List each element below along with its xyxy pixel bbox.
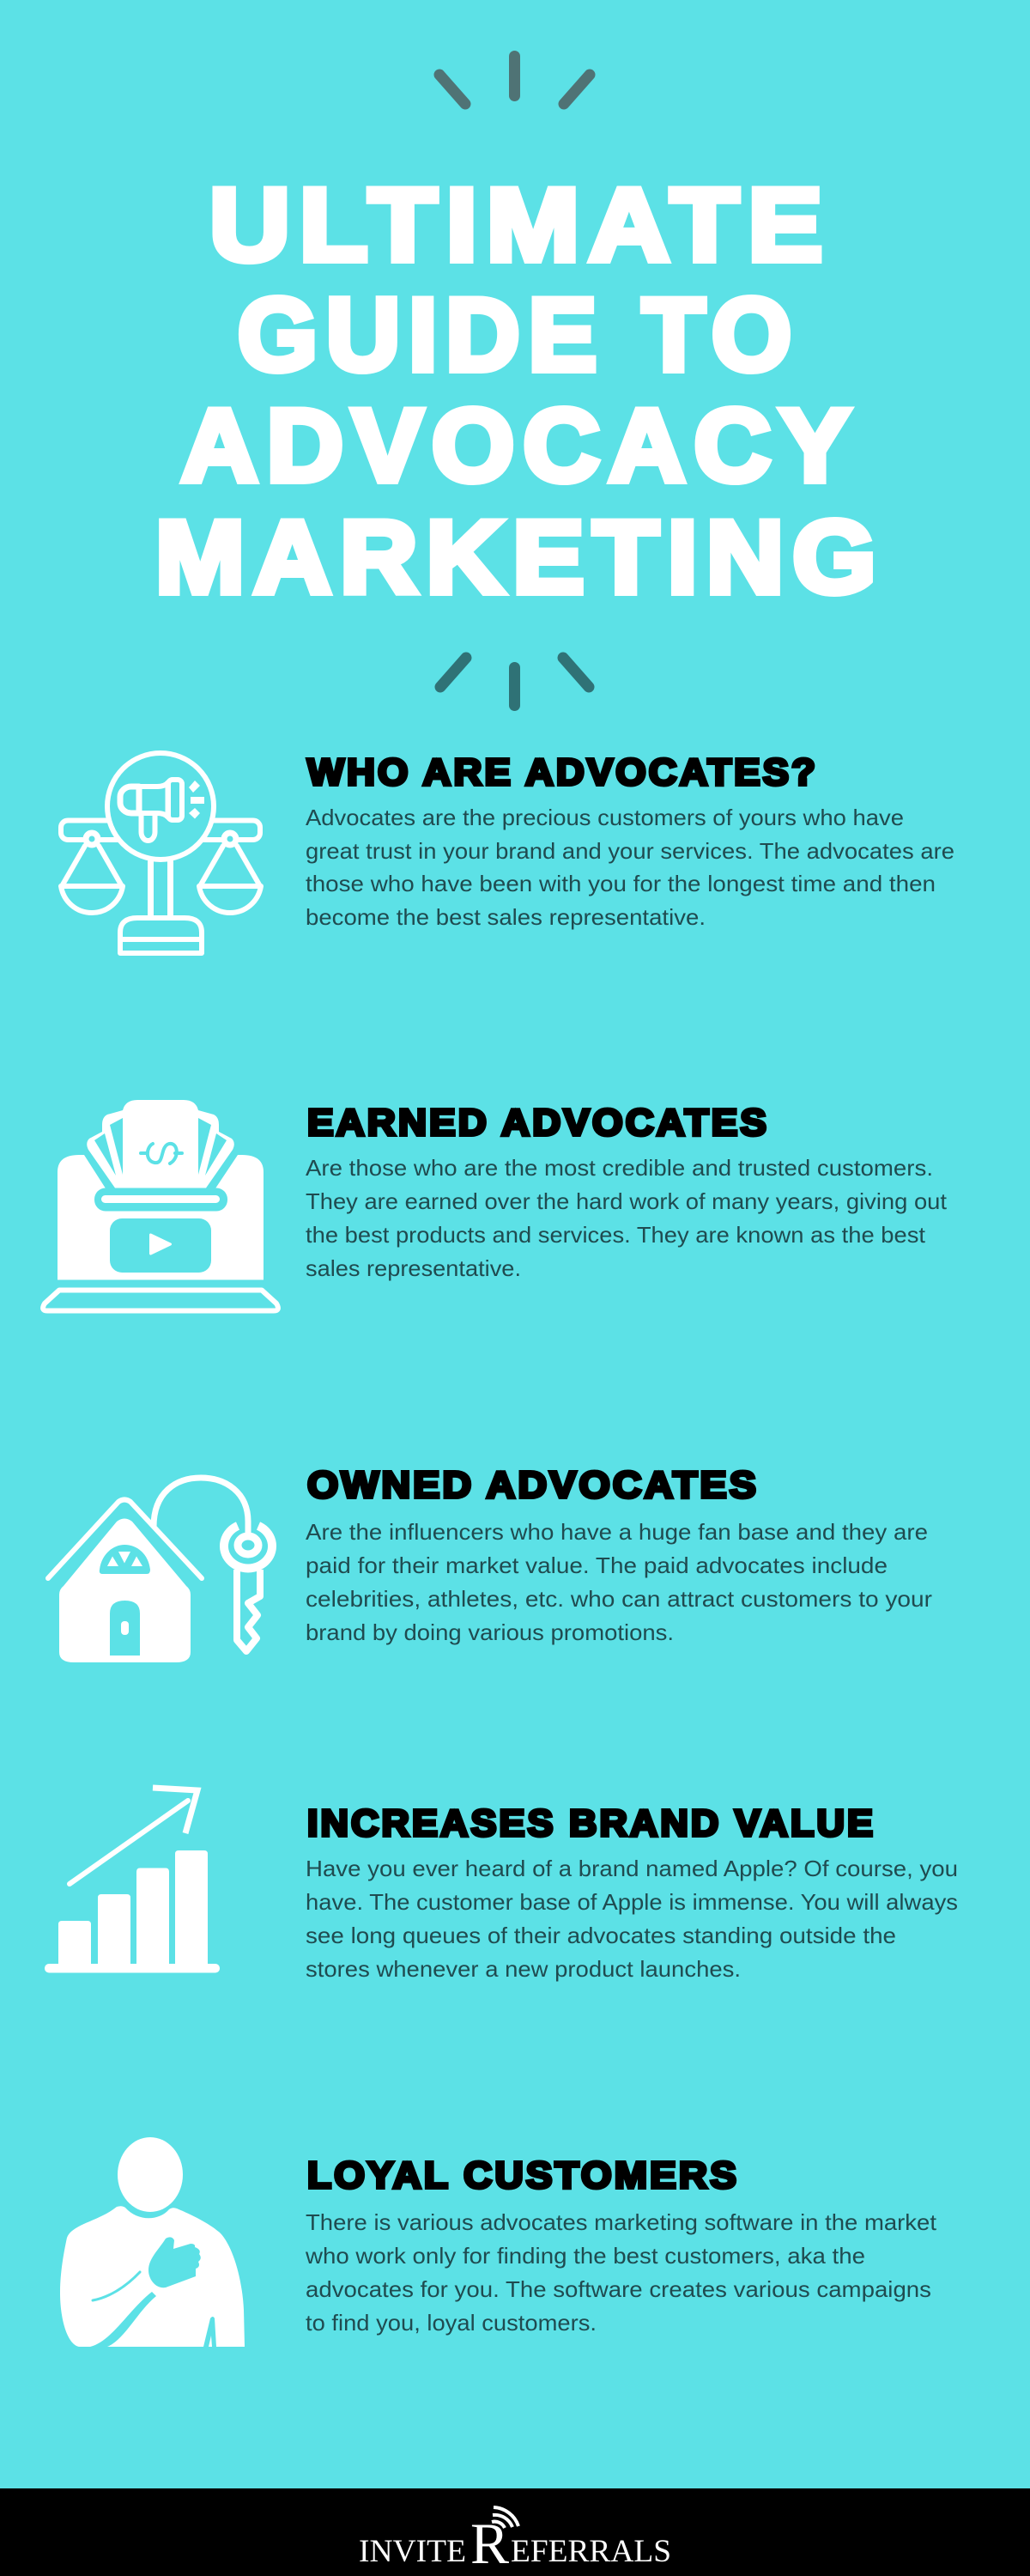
logo: InviteReferrals: R — [470, 2511, 510, 2576]
text block — [306, 1155, 948, 1281]
text block — [306, 1519, 932, 1645]
text block: They are earned over the hard work of many years, giving out — [306, 1188, 948, 1214]
text block: see long queues of their advocates standing outside the — [306, 1923, 896, 1948]
heading: LOYAL CUSTOMERS — [307, 2154, 739, 2196]
logo: InviteReferrals: EFERRALS — [511, 2534, 671, 2569]
text block: become the best sales representative. — [306, 904, 706, 930]
text block: paid for their market value. The paid advocates include — [306, 1552, 888, 1578]
text block: Are those who are the most credible and trusted customers. — [306, 1155, 933, 1181]
text block: celebrities, athletes, etc. who can attract customers to your — [306, 1586, 932, 1612]
title: GUIDE TO — [238, 277, 800, 392]
bottom burst rays — [440, 658, 589, 706]
panel: loyal customers — [60, 2137, 937, 2347]
title: ULTIMATE — [209, 167, 832, 283]
icon: scales with megaphone — [61, 753, 261, 953]
icon: rising bar chart with arrow — [45, 1788, 220, 1973]
panel: increases brand value — [45, 1788, 958, 1982]
footer band — [0, 2488, 1030, 2576]
text block — [306, 805, 954, 930]
text block: Are the influencers who have a huge fan base and they are — [306, 1519, 928, 1545]
logo: InviteReferrals: INVITE — [359, 2534, 466, 2569]
heading: EARNED ADVOCATES — [307, 1102, 769, 1144]
logo: InviteReferrals — [359, 2507, 671, 2576]
heading: INCREASES BRAND VALUE — [307, 1802, 876, 1844]
text block: great trust in your brand and your services. The advocates are — [306, 838, 954, 864]
icon: house and key — [48, 1478, 272, 1662]
panel: earned advocates — [43, 1100, 948, 1310]
text block — [306, 1856, 958, 1982]
text block: who work only for finding the best customers, aka the — [305, 2243, 865, 2269]
text block — [305, 2209, 937, 2336]
text block: sales representative. — [306, 1255, 521, 1281]
icon: person with hand on heart — [60, 2137, 245, 2347]
text block: advocates for you. The software creates various campaigns — [306, 2276, 931, 2302]
title — [155, 167, 885, 615]
text block: those who have been with you for the longest time and then — [306, 871, 936, 896]
icon: laptop with money — [43, 1100, 278, 1310]
text block: There is various advocates marketing software in the market — [306, 2209, 937, 2235]
top burst rays — [439, 57, 590, 104]
panel: who are advocates — [61, 751, 954, 953]
panel: owned advocates — [48, 1464, 932, 1662]
text block: Have you ever heard of a brand named Apple? Of course, you — [306, 1856, 958, 1881]
text block: to find you, loyal customers. — [306, 2310, 597, 2336]
heading: WHO ARE ADVOCATES? — [307, 751, 818, 793]
text block: stores whenever a new product launches. — [306, 1956, 741, 1982]
text block: the best products and services. They are known as the best — [306, 1222, 926, 1248]
heading: OWNED ADVOCATES — [307, 1464, 759, 1506]
text block: brand by doing various promotions. — [306, 1619, 674, 1645]
title: MARKETING — [155, 500, 885, 615]
text block: Advocates are the precious customers of yours who have — [306, 805, 904, 830]
title: ADVOCACY — [181, 388, 859, 503]
text block: have. The customer base of Apple is immense. You will always — [306, 1889, 958, 1915]
